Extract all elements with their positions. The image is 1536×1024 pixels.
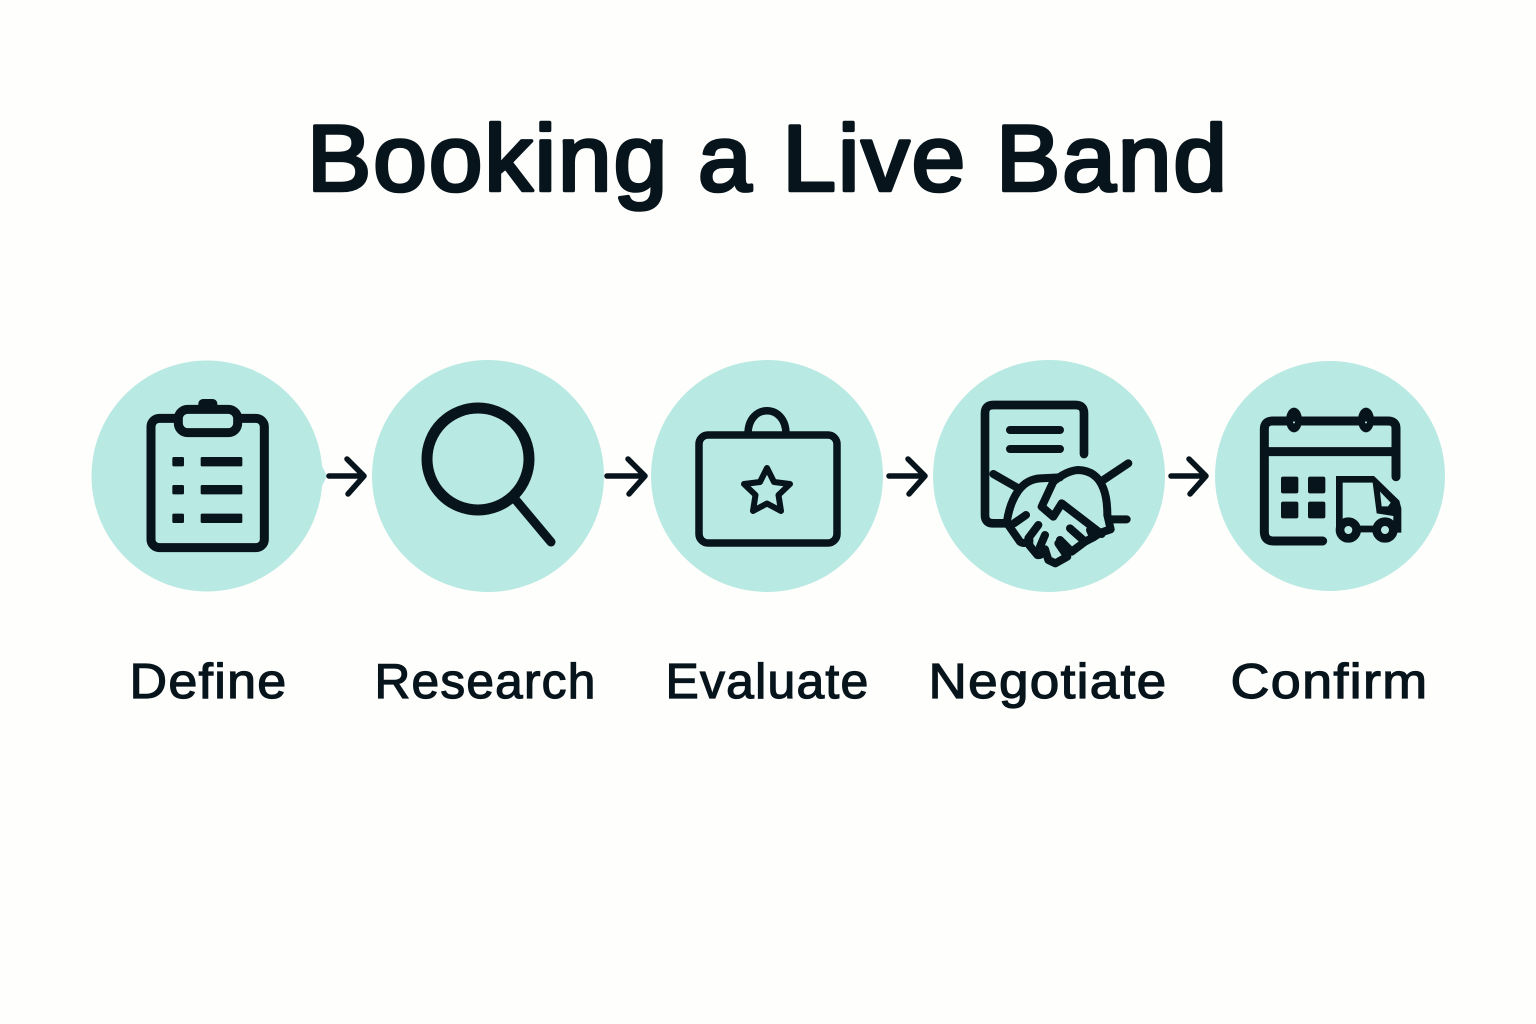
label: Research: Research <box>374 655 596 709</box>
icon: calendar with truck <box>1264 408 1401 541</box>
circle: define <box>92 360 327 592</box>
circle: confirm <box>1215 361 1445 591</box>
step 3: Evaluate <box>651 360 883 592</box>
arrow: evaluate to negotiate <box>889 459 925 494</box>
arrow: negotiate to confirm <box>1171 459 1206 494</box>
step 1: Define <box>92 360 327 592</box>
step 4: Negotiate <box>933 360 1165 592</box>
icon: clipboard <box>151 399 264 548</box>
arrow: define to research <box>329 459 364 494</box>
delivery truck <box>1336 476 1401 538</box>
step 5: Confirm <box>1215 361 1445 591</box>
handshake <box>993 463 1128 563</box>
circle: evaluate <box>651 360 883 592</box>
label: Negotiate: Negotiate <box>928 655 1168 709</box>
circle: negotiate <box>933 360 1165 592</box>
circle: research <box>372 360 604 592</box>
label: Confirm: Confirm <box>1230 655 1428 709</box>
arrow: research to evaluate <box>607 459 645 494</box>
label: Define: Define <box>130 655 288 709</box>
contract document <box>985 405 1084 523</box>
label: Evaluate: Evaluate <box>666 655 870 709</box>
icon: magnifying glass <box>427 408 551 542</box>
icon: briefcase with star <box>699 411 837 543</box>
title: Booking a Live Band <box>307 106 1229 210</box>
icon: contract and handshake <box>985 405 1128 563</box>
step 2: Research <box>372 360 604 592</box>
